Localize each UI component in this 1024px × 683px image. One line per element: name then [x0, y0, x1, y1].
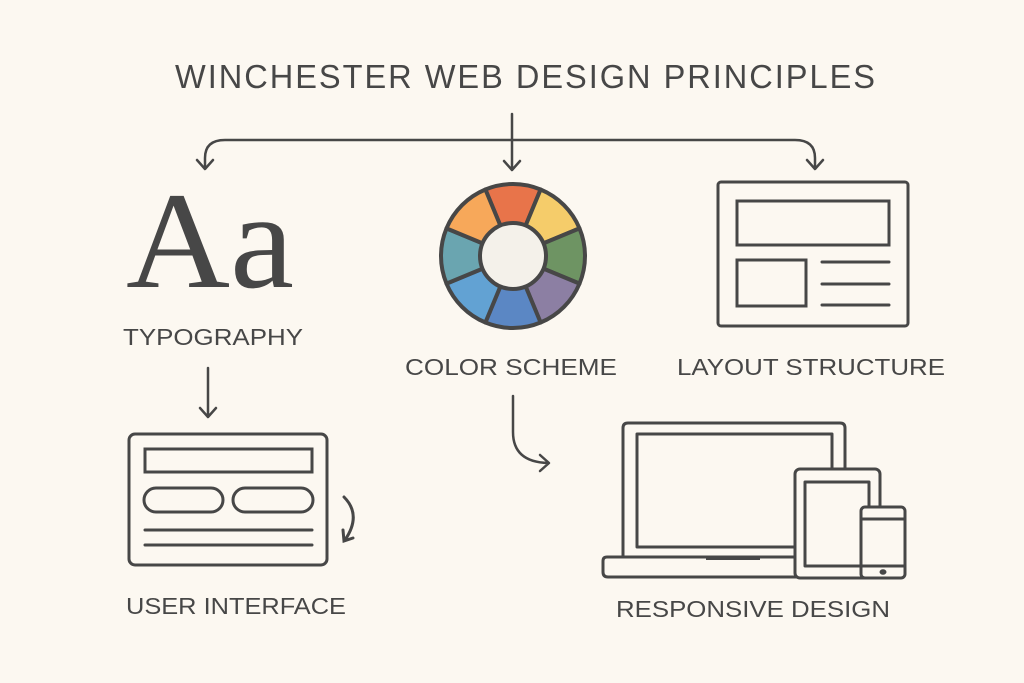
label: layout structure: LAYOUT STRUCTURE [677, 354, 945, 380]
icon: Aa typography: Aa [126, 164, 294, 317]
arrow: color to responsive [513, 396, 549, 471]
icon: layout structure [718, 182, 908, 326]
icon: color wheel [441, 184, 585, 328]
label: typography: TYPOGRAPHY [123, 324, 303, 350]
label: color scheme: COLOR SCHEME [405, 354, 617, 380]
title: WINCHESTER WEB DESIGN PRINCIPLES [175, 58, 877, 95]
arrow: branching connector [197, 114, 823, 170]
icon: responsive devices [603, 423, 905, 578]
arrow: typography to UI [200, 368, 216, 417]
label: user interface: USER INTERFACE [126, 593, 346, 619]
icon: user interface [129, 434, 353, 565]
label: responsive design: RESPONSIVE DESIGN [616, 596, 890, 622]
